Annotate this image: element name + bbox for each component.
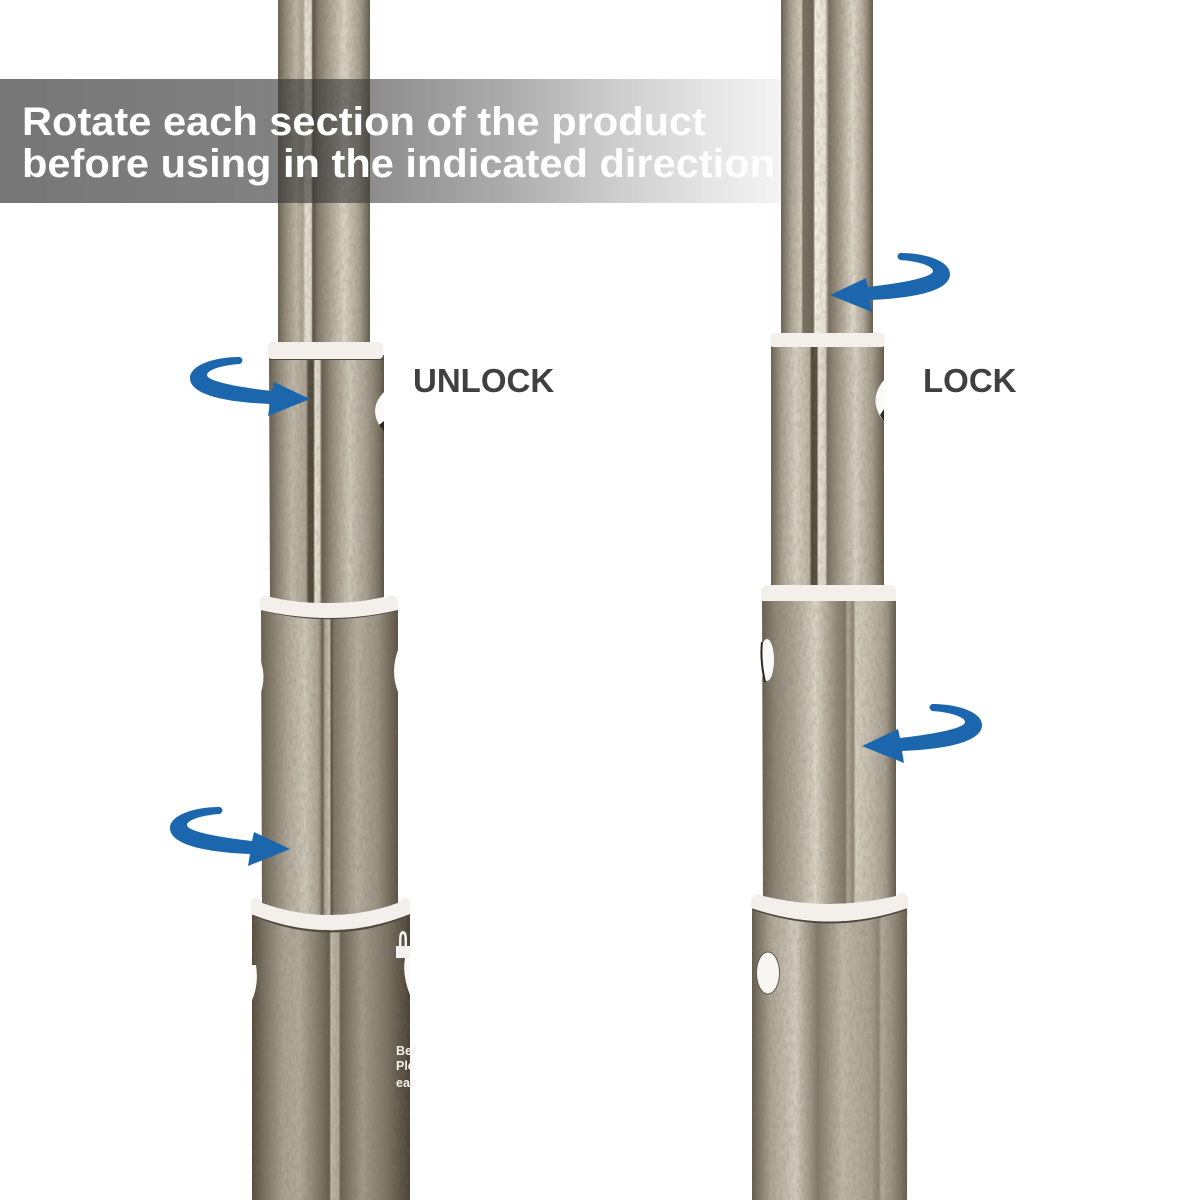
printed label text [396,1044,417,1090]
hole: right third section [760,639,774,682]
left pole middle collar [260,595,398,618]
left pole bottom section [252,905,410,1200]
hole: left bottom section right [404,958,410,995]
left pole top collar [268,342,383,360]
right pole second section [771,346,884,585]
headline text: Rotate each section of the product [22,100,706,144]
printed label text: Ple [396,1059,415,1073]
hole: left bottom section left [252,965,257,1000]
right pole top section [781,0,873,333]
left pole third section [261,610,398,915]
lock icon [396,931,410,958]
printed label text: eac [396,1076,417,1090]
left pole lower collar [251,897,410,932]
metal pole bodies [240,0,920,1200]
hole: left third section right [394,650,398,692]
arrow: lock lower [862,704,982,763]
right pole third section [762,598,896,904]
printed label text: Bef [396,1044,417,1058]
right pole bottom section [752,905,907,1200]
left pole top section [278,0,370,344]
label: unlock: UNLOCK [413,362,554,399]
left telescopic pole [252,0,410,1200]
arrow: lock upper [830,253,950,312]
arrow: unlock lower [170,807,290,866]
hole: left second section [375,392,384,432]
headline band [0,79,840,203]
hole: right bottom section [756,952,780,994]
headline text: before using in the indicated direction [22,142,775,186]
arrow: unlock upper [190,357,310,416]
label: lock: LOCK [923,362,1017,399]
right pole lower collar [751,893,908,922]
right pole top collar [771,333,884,347]
hole: left third section left [261,662,264,692]
collars [251,333,908,932]
left pole second section [269,355,384,604]
pole holes and print [252,380,884,1090]
right telescopic pole [752,0,907,1200]
metal surface grain [240,0,920,1200]
hole: right second section [876,380,884,422]
right pole middle collar [761,585,896,601]
